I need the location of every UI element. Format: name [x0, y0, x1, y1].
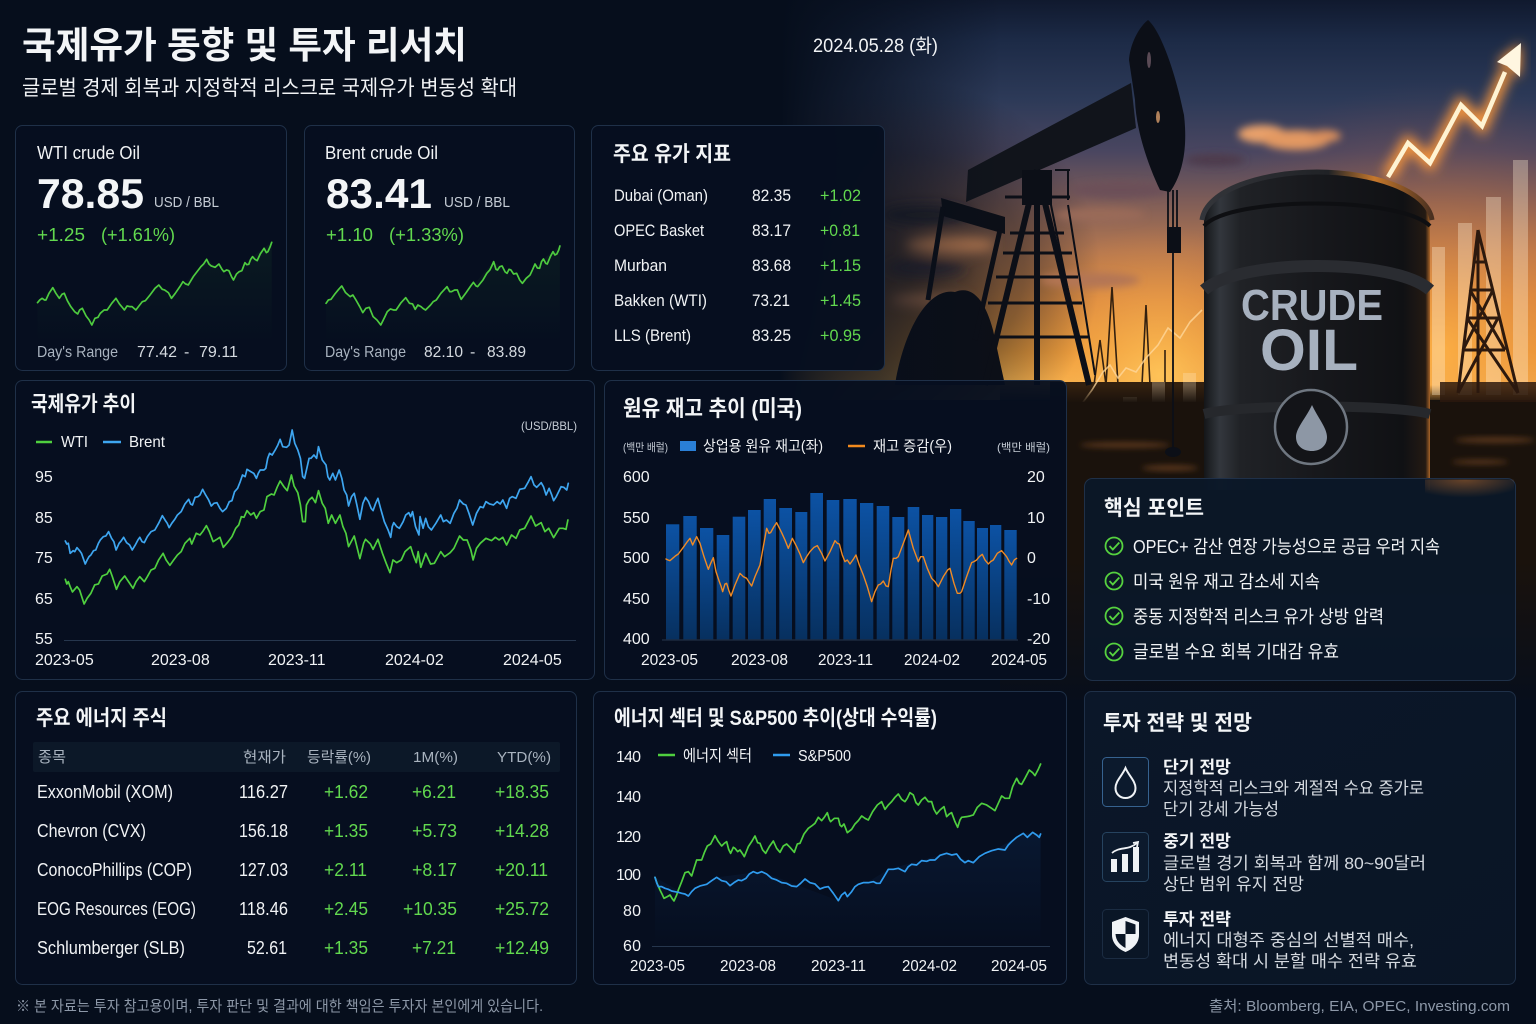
legend: 재고 증감(우) — [873, 438, 952, 455]
indicator rows: 83.17 — [752, 221, 791, 240]
panel: major energy stocks table: 주요 에너지 주식 — [36, 707, 167, 730]
investment strategy text: 에너지 대형주 중심의 선별적 매수, — [1163, 931, 1414, 950]
left y axis labels: 400 — [623, 631, 650, 648]
row: ExxonMobil: +1.62 — [324, 782, 368, 802]
panel: key points: 핵심 포인트 — [1104, 497, 1204, 520]
ground — [1000, 385, 1536, 403]
row: Chevron: +5.73 — [412, 821, 457, 841]
y axis labels: 140 — [616, 789, 641, 806]
panel: WTI crude oil: WTI crude Oil — [37, 143, 140, 163]
indicator rows: 73.21 — [752, 291, 790, 310]
distant skyline — [1050, 287, 1205, 402]
mid-term outlook text — [1163, 832, 1426, 894]
y axis labels: 140 — [616, 749, 641, 766]
short-term outlook text: 단기 강세 가능성 — [1163, 800, 1279, 819]
y axis labels: 120 — [616, 829, 641, 846]
orange line: inventory change — [666, 523, 1017, 602]
icon: bar chart with arrow — [1102, 832, 1148, 882]
indicator rows: Dubai (Oman) — [614, 186, 708, 205]
indicator rows: +1.02 — [820, 186, 861, 205]
row: Schlumberger — [37, 938, 549, 958]
row: ExxonMobil: 116.27 — [239, 782, 288, 802]
x axis labels: 2023-05 — [641, 652, 698, 669]
panel: WTI crude oil — [16, 126, 286, 370]
barrel label OIL: OIL — [1260, 318, 1358, 383]
oil barrel — [1202, 172, 1432, 490]
right y axis labels: 20 — [1027, 469, 1045, 486]
row: EOG Resources: 118.46 — [239, 899, 288, 919]
row: EOG Resources: EOG Resources (EOG) — [37, 899, 196, 919]
table header: YTD(%) — [497, 749, 551, 766]
x axis labels: 2023-08 — [151, 652, 210, 669]
key point 1: OPEC+ 감산 연장 가능성으로 공급 우려 지속 — [1133, 537, 1440, 557]
S&P500 line — [655, 832, 1041, 901]
Brent price: 83.41 — [326, 170, 432, 217]
panel: Brent crude oil — [304, 126, 574, 370]
panel: WTI crude oil: 77.42 — [137, 344, 177, 361]
row: Chevron — [37, 821, 549, 841]
row: ConocoPhillips: ConocoPhillips (COP) — [37, 860, 192, 880]
short-term outlook text: 단기 전망 — [1163, 758, 1231, 777]
barrel drop emblem — [1275, 390, 1347, 464]
row: Schlumberger: +1.35 — [324, 938, 368, 958]
row: Chevron: +1.35 — [324, 821, 368, 841]
x axis labels — [630, 958, 1047, 975]
panel: investment strategy and outlook — [1084, 692, 1516, 984]
investment strategy text: 변동성 확대 시 분할 매수 전략 유효 — [1163, 952, 1417, 971]
legend — [623, 438, 1050, 455]
table header: 1M(%) — [413, 749, 458, 766]
left y axis labels: 550 — [623, 510, 650, 527]
y axis labels: 55 — [35, 631, 53, 648]
key point 4: 글로벌 수요 회복 기대감 유효 — [1133, 642, 1339, 662]
x axis labels — [641, 652, 1047, 669]
legend — [36, 434, 166, 451]
legend: S&P500 — [798, 748, 851, 765]
rising glowing arrow — [1388, 43, 1521, 177]
small trend line overlay — [1081, 310, 1202, 405]
footer source: 출처: Bloomberg, EIA, OPEC, Investing.com — [1209, 998, 1510, 1015]
panel: US crude inventory chart — [604, 380, 1066, 680]
pumpjack head slots — [1147, 52, 1160, 123]
row: Chevron: +14.28 — [495, 821, 549, 841]
panel: WTI crude oil: 79.11 — [199, 344, 238, 361]
table header — [33, 742, 560, 772]
legend: 에너지 섹터 — [683, 747, 752, 765]
indicator rows: 83.25 — [752, 326, 791, 345]
key point 2: 미국 원유 재고 감소세 지속 — [1133, 572, 1320, 592]
panel: major oil indicators — [592, 126, 884, 370]
row: EOG Resources: +2.45 — [324, 899, 368, 919]
panel: major oil indicators: 주요 유가 지표 — [613, 143, 731, 166]
y axis labels: 95 — [35, 469, 53, 486]
row: ConocoPhillips: +2.11 — [324, 860, 367, 880]
panel: international oil price trend chart: (USD/BBL) — [521, 419, 577, 433]
row: Schlumberger: 52.61 — [247, 938, 287, 958]
panel: international oil price trend chart — [16, 380, 594, 680]
row: ExxonMobil: ExxonMobil (XOM) — [37, 782, 173, 802]
x axis labels: 2024-02 — [904, 652, 960, 669]
footer disclaimer: ※ 본 자료는 투자 참고용이며, 투자 판단 및 결과에 대한 책임은 투자자 본인에게 있습니다. — [16, 998, 543, 1015]
barrel label CRUDE: CRUDE — [1241, 281, 1383, 330]
short-term outlook text — [1163, 758, 1424, 819]
legend: (백만 배럴) — [623, 441, 668, 454]
short-term outlook text: 지정학적 리스크와 계절적 수요 증가로 — [1163, 779, 1424, 798]
indicator rows — [614, 186, 861, 345]
row: ConocoPhillips: +20.11 — [495, 860, 548, 880]
right y axis labels: -20 — [1027, 631, 1050, 648]
Brent sparkline — [326, 246, 560, 343]
y axis labels: 65 — [35, 591, 53, 608]
panel: key points — [1084, 478, 1516, 680]
y axis labels — [616, 749, 641, 955]
table header: 등락률(%) — [307, 749, 371, 766]
x axis labels: 2023-08 — [720, 958, 776, 975]
panel: Brent crude oil: Brent crude Oil — [325, 143, 438, 163]
right y axis labels: -10 — [1027, 591, 1050, 608]
x axis labels — [35, 652, 562, 669]
legend — [658, 747, 851, 765]
row: ConocoPhillips: +8.17 — [412, 860, 457, 880]
panel: energy sector vs S&P500 chart — [594, 692, 1066, 984]
row: ConocoPhillips — [37, 860, 548, 880]
indicator rows: OPEC Basket — [614, 221, 704, 240]
indicator rows: +0.95 — [820, 326, 861, 345]
icon: shield — [1102, 910, 1148, 958]
left y axis labels: 450 — [623, 591, 650, 608]
panel: Brent crude oil: 83.89 — [487, 344, 526, 361]
row: ExxonMobil: +18.35 — [495, 782, 549, 802]
row: Schlumberger: +7.21 — [412, 938, 456, 958]
panel: international oil price trend chart: 국제유가 추이 — [31, 393, 136, 416]
pumpjack silhouette — [895, 20, 1185, 457]
x axis labels: 2023-05 — [630, 958, 685, 975]
x axis labels: 2023-11 — [818, 652, 873, 669]
x axis labels: 2024-05 — [503, 652, 562, 669]
panel: US crude inventory chart: 원유 재고 추이 (미국) — [623, 396, 802, 421]
panel: investment strategy and outlook: 투자 전략 및 전망 — [1103, 712, 1252, 735]
x axis labels: 2024-05 — [991, 958, 1047, 975]
x axis labels: 2023-05 — [35, 652, 94, 669]
small translucent bar chart overlay — [1123, 373, 1196, 423]
key point 3: 중동 지정학적 리스크 유가 상방 압력 — [1133, 607, 1384, 627]
Brent day's range: Day's Range — [325, 344, 406, 361]
table header: 종목 — [38, 749, 66, 766]
indicator rows: LLS (Brent) — [614, 326, 691, 345]
subtitle: 글로벌 경제 회복과 지정학적 리스크로 국제유가 변동성 확대 — [22, 77, 517, 100]
left y axis labels: 500 — [623, 550, 650, 567]
panel: WTI crude oil: (+1.61%) — [101, 224, 175, 245]
title: 국제유가 동향 및 투자 리서치 — [22, 25, 467, 66]
right y axis labels — [1027, 469, 1050, 648]
mid-term outlook text: 글로벌 경기 회복과 함께 80~90달러 — [1163, 854, 1426, 873]
x axis labels: 2023-11 — [268, 652, 326, 669]
y axis labels: 60 — [623, 938, 641, 955]
WTI change: +1.25 — [37, 224, 85, 245]
panel: major energy stocks table — [16, 692, 576, 984]
indicator rows: Murban — [614, 256, 667, 275]
mid-term outlook text: 상단 범위 유지 전망 — [1163, 875, 1304, 894]
row: EOG Resources: +25.72 — [495, 899, 549, 919]
date: 2024.05.28 (화) — [813, 35, 938, 57]
S&P500 area — [655, 833, 1041, 946]
bar chart on right of barrel — [1432, 160, 1528, 395]
Brent change: +1.10 — [326, 224, 373, 245]
investment strategy text: 투자 전략 — [1163, 910, 1231, 929]
row: EOG Resources: +10.35 — [403, 899, 457, 919]
WTI line — [65, 475, 568, 604]
legend: 상업용 원유 재고(좌) — [703, 438, 823, 455]
oil derrick right — [1440, 230, 1536, 402]
energy sector line — [655, 764, 1041, 901]
x axis labels: 2024-02 — [385, 652, 444, 669]
left y axis labels — [623, 469, 650, 648]
Brent line — [65, 430, 568, 564]
row: ExxonMobil — [37, 782, 549, 802]
right y axis labels: 0 — [1027, 550, 1036, 567]
legend: Brent — [129, 434, 166, 451]
legend: (백만 배럴) — [997, 441, 1050, 454]
left y axis labels: 600 — [623, 469, 650, 486]
panel: Brent crude oil: (+1.33%) — [389, 224, 464, 245]
indicator rows: +1.15 — [820, 256, 861, 275]
y axis labels — [35, 469, 53, 648]
panel: Brent crude oil: 82.10 — [424, 344, 463, 361]
row: Chevron: Chevron (CVX) — [37, 821, 146, 841]
hero illustration: pumpjack and crude oil barrel at sunset — [780, 0, 1536, 1024]
indicator rows: 83.68 — [752, 256, 791, 275]
bars: commercial crude stocks — [666, 493, 1017, 639]
y axis labels: 75 — [35, 550, 53, 567]
x axis labels: 2023-08 — [731, 652, 788, 669]
right y axis labels: 10 — [1027, 510, 1045, 527]
panel: WTI crude oil: - — [184, 344, 189, 361]
WTI sparkline — [38, 242, 272, 343]
row: Schlumberger: +12.49 — [495, 938, 549, 958]
row: EOG Resources — [37, 899, 549, 919]
row: ConocoPhillips: 127.03 — [239, 860, 288, 880]
y axis labels: 85 — [35, 510, 53, 527]
x axis labels: 2024-02 — [902, 958, 957, 975]
indicator rows: 82.35 — [752, 186, 791, 205]
row: ExxonMobil: +6.21 — [412, 782, 456, 802]
legend: WTI — [61, 434, 88, 451]
panel: Brent crude oil: - — [470, 344, 475, 361]
x axis labels: 2023-11 — [811, 958, 866, 975]
indicator rows: +1.45 — [820, 291, 861, 310]
table header: 현재가 — [243, 749, 286, 766]
investment strategy text — [1163, 910, 1417, 971]
indicator rows: Bakken (WTI) — [614, 291, 707, 310]
WTI price: 78.85 — [37, 170, 144, 217]
row: Chevron: 156.18 — [239, 821, 288, 841]
y axis labels: 80 — [623, 903, 641, 920]
icon: water drop — [1102, 758, 1148, 806]
panel: WTI crude oil: USD / BBL — [154, 194, 219, 211]
mid-term outlook text: 중기 전망 — [1163, 832, 1231, 851]
panel: Brent crude oil: USD / BBL — [444, 194, 510, 211]
y axis labels: 100 — [616, 867, 641, 884]
indicator rows: +0.81 — [820, 221, 860, 240]
x axis labels: 2024-05 — [991, 652, 1047, 669]
row: Schlumberger: Schlumberger (SLB) — [37, 938, 185, 958]
panel: energy sector vs S&P500 chart: 에너지 섹터 및 S&P500 추이(상대 수익률) — [614, 707, 937, 730]
WTI day's range: Day's Range — [37, 344, 118, 361]
